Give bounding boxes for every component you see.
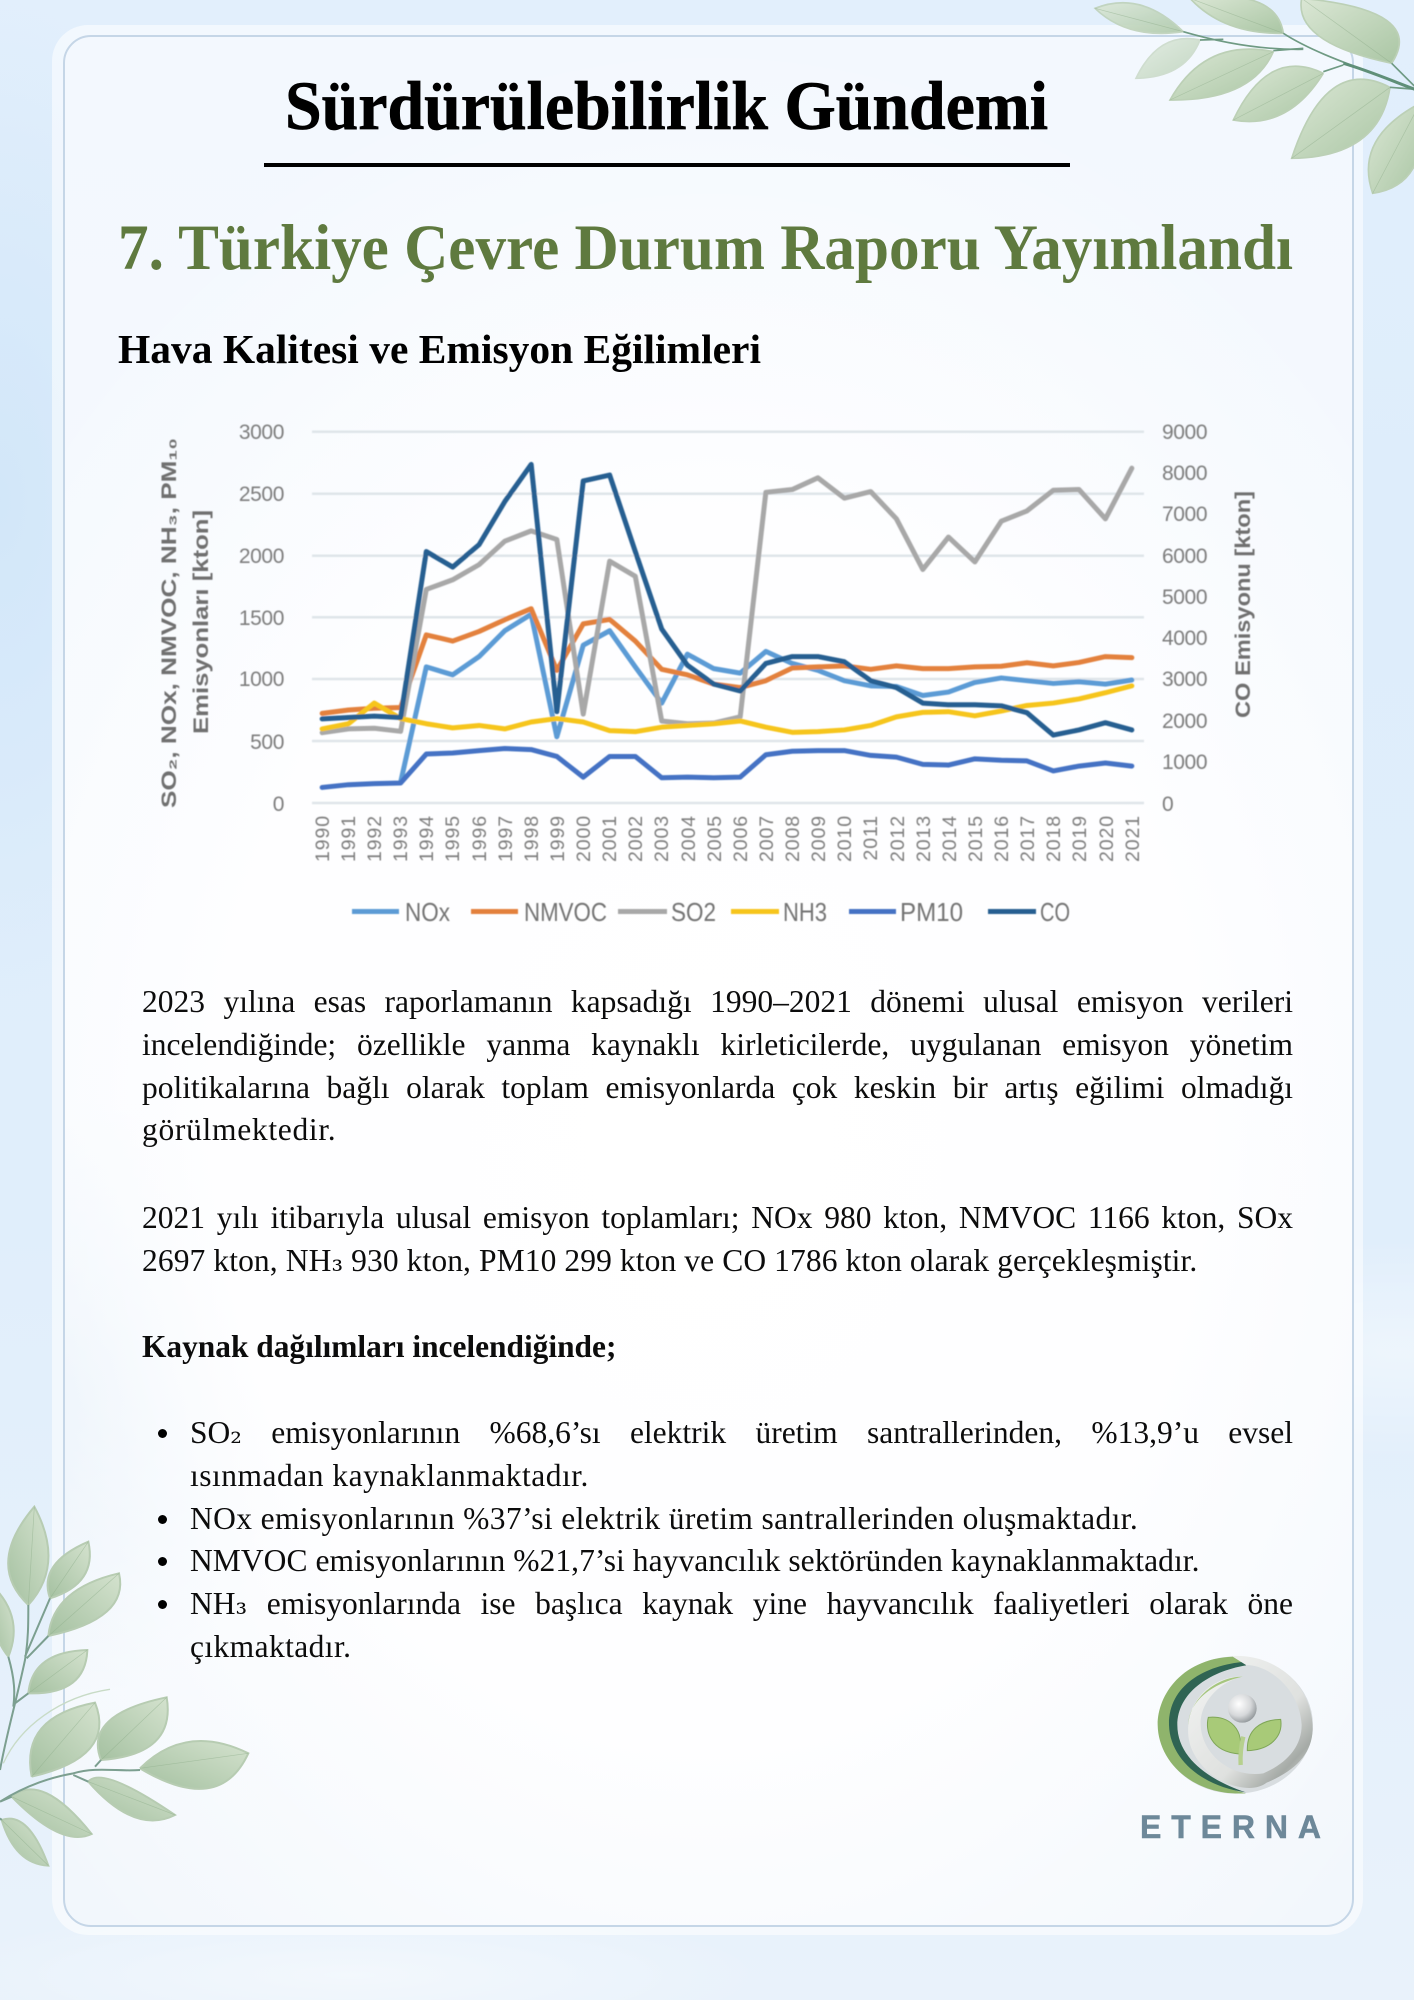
bullet: NH3: NH₃ emisyonlarında ise başlıca kaynak yine hayvancılık faaliyetleri olarak öne	[190, 1586, 1293, 1621]
year axis labels: 2006	[730, 815, 752, 862]
bullet: SO2	[158, 1415, 1293, 1493]
year axis labels: 1995	[442, 815, 464, 862]
left axis values: 0	[273, 793, 284, 816]
year axis labels: 1991	[338, 815, 360, 862]
sub heading: Hava Kalitesi ve Emisyon Eğilimleri	[118, 326, 761, 372]
bullet: SO2: SO₂ emisyonlarının %68,6’sı elektrik üretim santrallerinden, %13,9’u evsel	[190, 1415, 1293, 1450]
year axis labels: 1997	[495, 815, 517, 862]
legend	[352, 897, 1070, 927]
bullet: NH3: çıkmaktadır.	[190, 1629, 351, 1664]
series: PM10	[322, 749, 1132, 787]
bold lead-in: Kaynak dağılımları incelendiğinde;	[142, 1329, 616, 1364]
right axis values: 0	[1162, 793, 1173, 816]
year axis labels: 1999	[547, 815, 569, 862]
legend: SO2	[671, 897, 716, 927]
left axis values: 1000	[239, 668, 284, 691]
bullet: SO2: ısınmadan kaynaklanmaktadır.	[190, 1458, 589, 1493]
year axis labels: 2000	[573, 815, 595, 862]
year axis labels: 2012	[887, 815, 909, 862]
year axis labels: 2018	[1043, 815, 1065, 862]
decoration: bottom left leaves	[0, 1507, 248, 1866]
year axis labels: 2010	[834, 815, 856, 862]
main heading: 7. Türkiye Çevre Durum Raporu Yayımlandı	[118, 212, 1293, 284]
left axis values: 1500	[239, 607, 284, 630]
year axis labels: 2015	[965, 815, 987, 862]
year axis labels: 2020	[1096, 815, 1118, 862]
line chart: emissions 1990-2021	[158, 421, 1255, 927]
left axis values: 3000	[239, 421, 284, 444]
legend: NH3	[783, 897, 827, 927]
bullet: NOx: NOx emisyonlarının %37’si elektrik üretim santrallerinden oluşmaktadır.	[190, 1501, 1138, 1536]
right axis values: 2000	[1162, 710, 1207, 733]
logo sprout	[1207, 1717, 1281, 1765]
year axis labels: 2016	[991, 815, 1013, 862]
year axis labels: 2003	[651, 815, 673, 862]
data series	[322, 464, 1132, 787]
right axis title: CO Emisyonu [kton]	[1232, 491, 1255, 718]
series: NMVOC	[322, 609, 1132, 713]
year axis labels: 1996	[469, 815, 491, 862]
paragraph: 2021 totals: 2021 yılı itibarıyla ulusal emisyon toplamları; NOx 980 kton, NMVOC 1166 kton, SOx	[142, 1200, 1293, 1235]
year axis labels: 2005	[704, 815, 726, 862]
year axis labels: 2021	[1122, 815, 1144, 862]
year axis labels: 2017	[1017, 815, 1039, 862]
year axis labels: 2008	[782, 815, 804, 862]
legend: NOx	[405, 897, 450, 927]
paragraph: emission overview: 2023 yılına esas raporlamanın kapsadığı 1990–2021 dönemi ulusal emisyon verileri	[142, 984, 1293, 1019]
paragraph: 2021 totals	[142, 1200, 1293, 1278]
right axis values: 4000	[1162, 627, 1207, 650]
title rule	[264, 163, 1070, 167]
year axis labels: 2011	[860, 815, 882, 861]
year axis labels: 1994	[416, 815, 438, 862]
series: SO2	[322, 468, 1132, 733]
year axis labels: 1992	[364, 815, 386, 862]
right axis values	[1162, 421, 1207, 816]
year axis labels: 2014	[939, 815, 961, 862]
decoration: top right leaves	[1095, 0, 1414, 193]
year axis labels: 2007	[756, 815, 778, 862]
year axis labels: 2009	[808, 815, 830, 862]
year axis labels: 2013	[913, 815, 935, 862]
series: NOx	[401, 614, 1132, 782]
legend: NMVOC	[524, 897, 607, 927]
paragraph: emission overview	[142, 984, 1293, 1147]
logo: Eterna emblem	[1158, 1656, 1313, 1794]
paragraph: emission overview: görülmektedir.	[142, 1112, 336, 1147]
year axis labels: 1998	[521, 815, 543, 862]
paragraph: emission overview: incelendiğinde; özellikle yanma kaynaklı kirleticilerde, uygulanan emisyon yönetim	[142, 1027, 1293, 1062]
right axis values: 9000	[1162, 421, 1207, 444]
right axis values: 8000	[1162, 462, 1207, 485]
title: Sürdürülebilirlik Gündemi	[285, 68, 1048, 144]
year axis labels: 2001	[599, 815, 621, 862]
left axis title: Emisyonları [kton]	[190, 510, 213, 734]
year axis labels	[312, 815, 1144, 862]
year axis labels: 1990	[312, 815, 334, 862]
paragraph: emission overview: politikalarına bağlı olarak toplam emisyonlarda çok keskin bir artış eğilimi olmadığı	[142, 1070, 1293, 1105]
year axis labels: 2002	[625, 815, 647, 862]
bullet: NMVOC: NMVOC emisyonlarının %21,7’si hayvancılık sektöründen kaynaklanmaktadır.	[190, 1543, 1200, 1578]
paragraph: 2021 totals: 2697 kton, NH₃ 930 kton, PM10 299 kton ve CO 1786 kton olarak gerçekleşmiştir.	[142, 1243, 1197, 1278]
left axis values: 2500	[239, 483, 284, 506]
series: NH3	[322, 686, 1132, 732]
legend: PM10	[900, 897, 963, 927]
logo pearl	[1228, 1694, 1257, 1723]
bullet list: source breakdown	[158, 1415, 1293, 1664]
logo wordmark: ETERNA	[1140, 1809, 1321, 1845]
left axis values	[239, 421, 284, 816]
series: CO	[322, 464, 1132, 735]
right axis values: 5000	[1162, 586, 1207, 609]
year axis labels: 1993	[390, 815, 412, 862]
right axis values: 6000	[1162, 545, 1207, 568]
left axis values: 2000	[239, 545, 284, 568]
right axis values: 1000	[1162, 751, 1207, 774]
right axis values: 3000	[1162, 668, 1207, 691]
right axis values: 7000	[1162, 503, 1207, 526]
left axis title: SO₂, NOx, NMVOC, NH₃, PM₁₀	[158, 438, 181, 808]
year axis labels: 2004	[678, 815, 700, 862]
year axis labels: 2019	[1069, 815, 1091, 862]
legend: CO	[1040, 897, 1070, 927]
bullet: NH3	[158, 1586, 1293, 1664]
left axis values: 500	[250, 731, 284, 754]
gridlines	[312, 432, 1144, 803]
left axis title	[158, 438, 213, 808]
